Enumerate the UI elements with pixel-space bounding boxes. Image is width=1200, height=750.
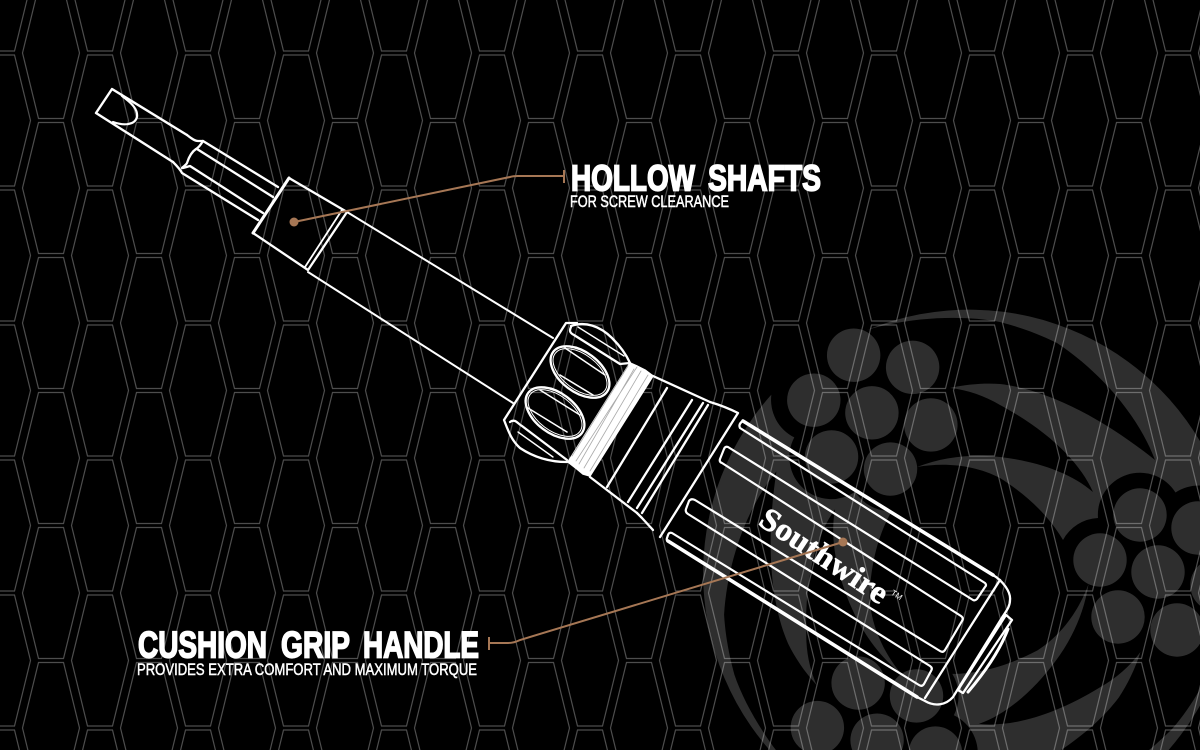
- callout leader: hollow shafts: [290, 170, 564, 226]
- heading: cushion grip handle: [138, 624, 479, 666]
- collar rings: [590, 376, 710, 513]
- watermark logo: circle of wire bundles: [703, 310, 1200, 750]
- screwdriver line drawing: [96, 89, 1012, 704]
- trademark: TM: [889, 588, 904, 602]
- heading: cushion grip handle: GRIP: [281, 624, 350, 666]
- subheading: hollow shafts: FOR SCREW CLEARANCE: [570, 193, 729, 211]
- heading: hollow shafts: HOLLOW: [571, 158, 695, 198]
- heading: hollow shafts: SHAFTS: [708, 158, 821, 198]
- shaft collar: [253, 178, 347, 270]
- long shaft: [308, 212, 553, 403]
- callout leader: cushion grip handle: [489, 538, 848, 650]
- flat blade tip: [96, 89, 187, 162]
- heading: hollow shafts: [571, 158, 821, 198]
- handle end cap: [917, 575, 1012, 704]
- subheading: cushion grip handle: PROVIDES EXTRA COMFORT AND MAXIMUM TORQUE: [137, 661, 477, 679]
- threaded ring: [568, 363, 653, 476]
- heading: cushion grip handle: CUSHION: [138, 624, 267, 666]
- handle body with grip ribs: [637, 402, 993, 697]
- brand name on handle: Southwire: [753, 500, 896, 611]
- knob with oval grips: [504, 323, 630, 462]
- heading: cushion grip handle: HANDLE: [363, 624, 479, 666]
- hex shaft: [173, 135, 278, 220]
